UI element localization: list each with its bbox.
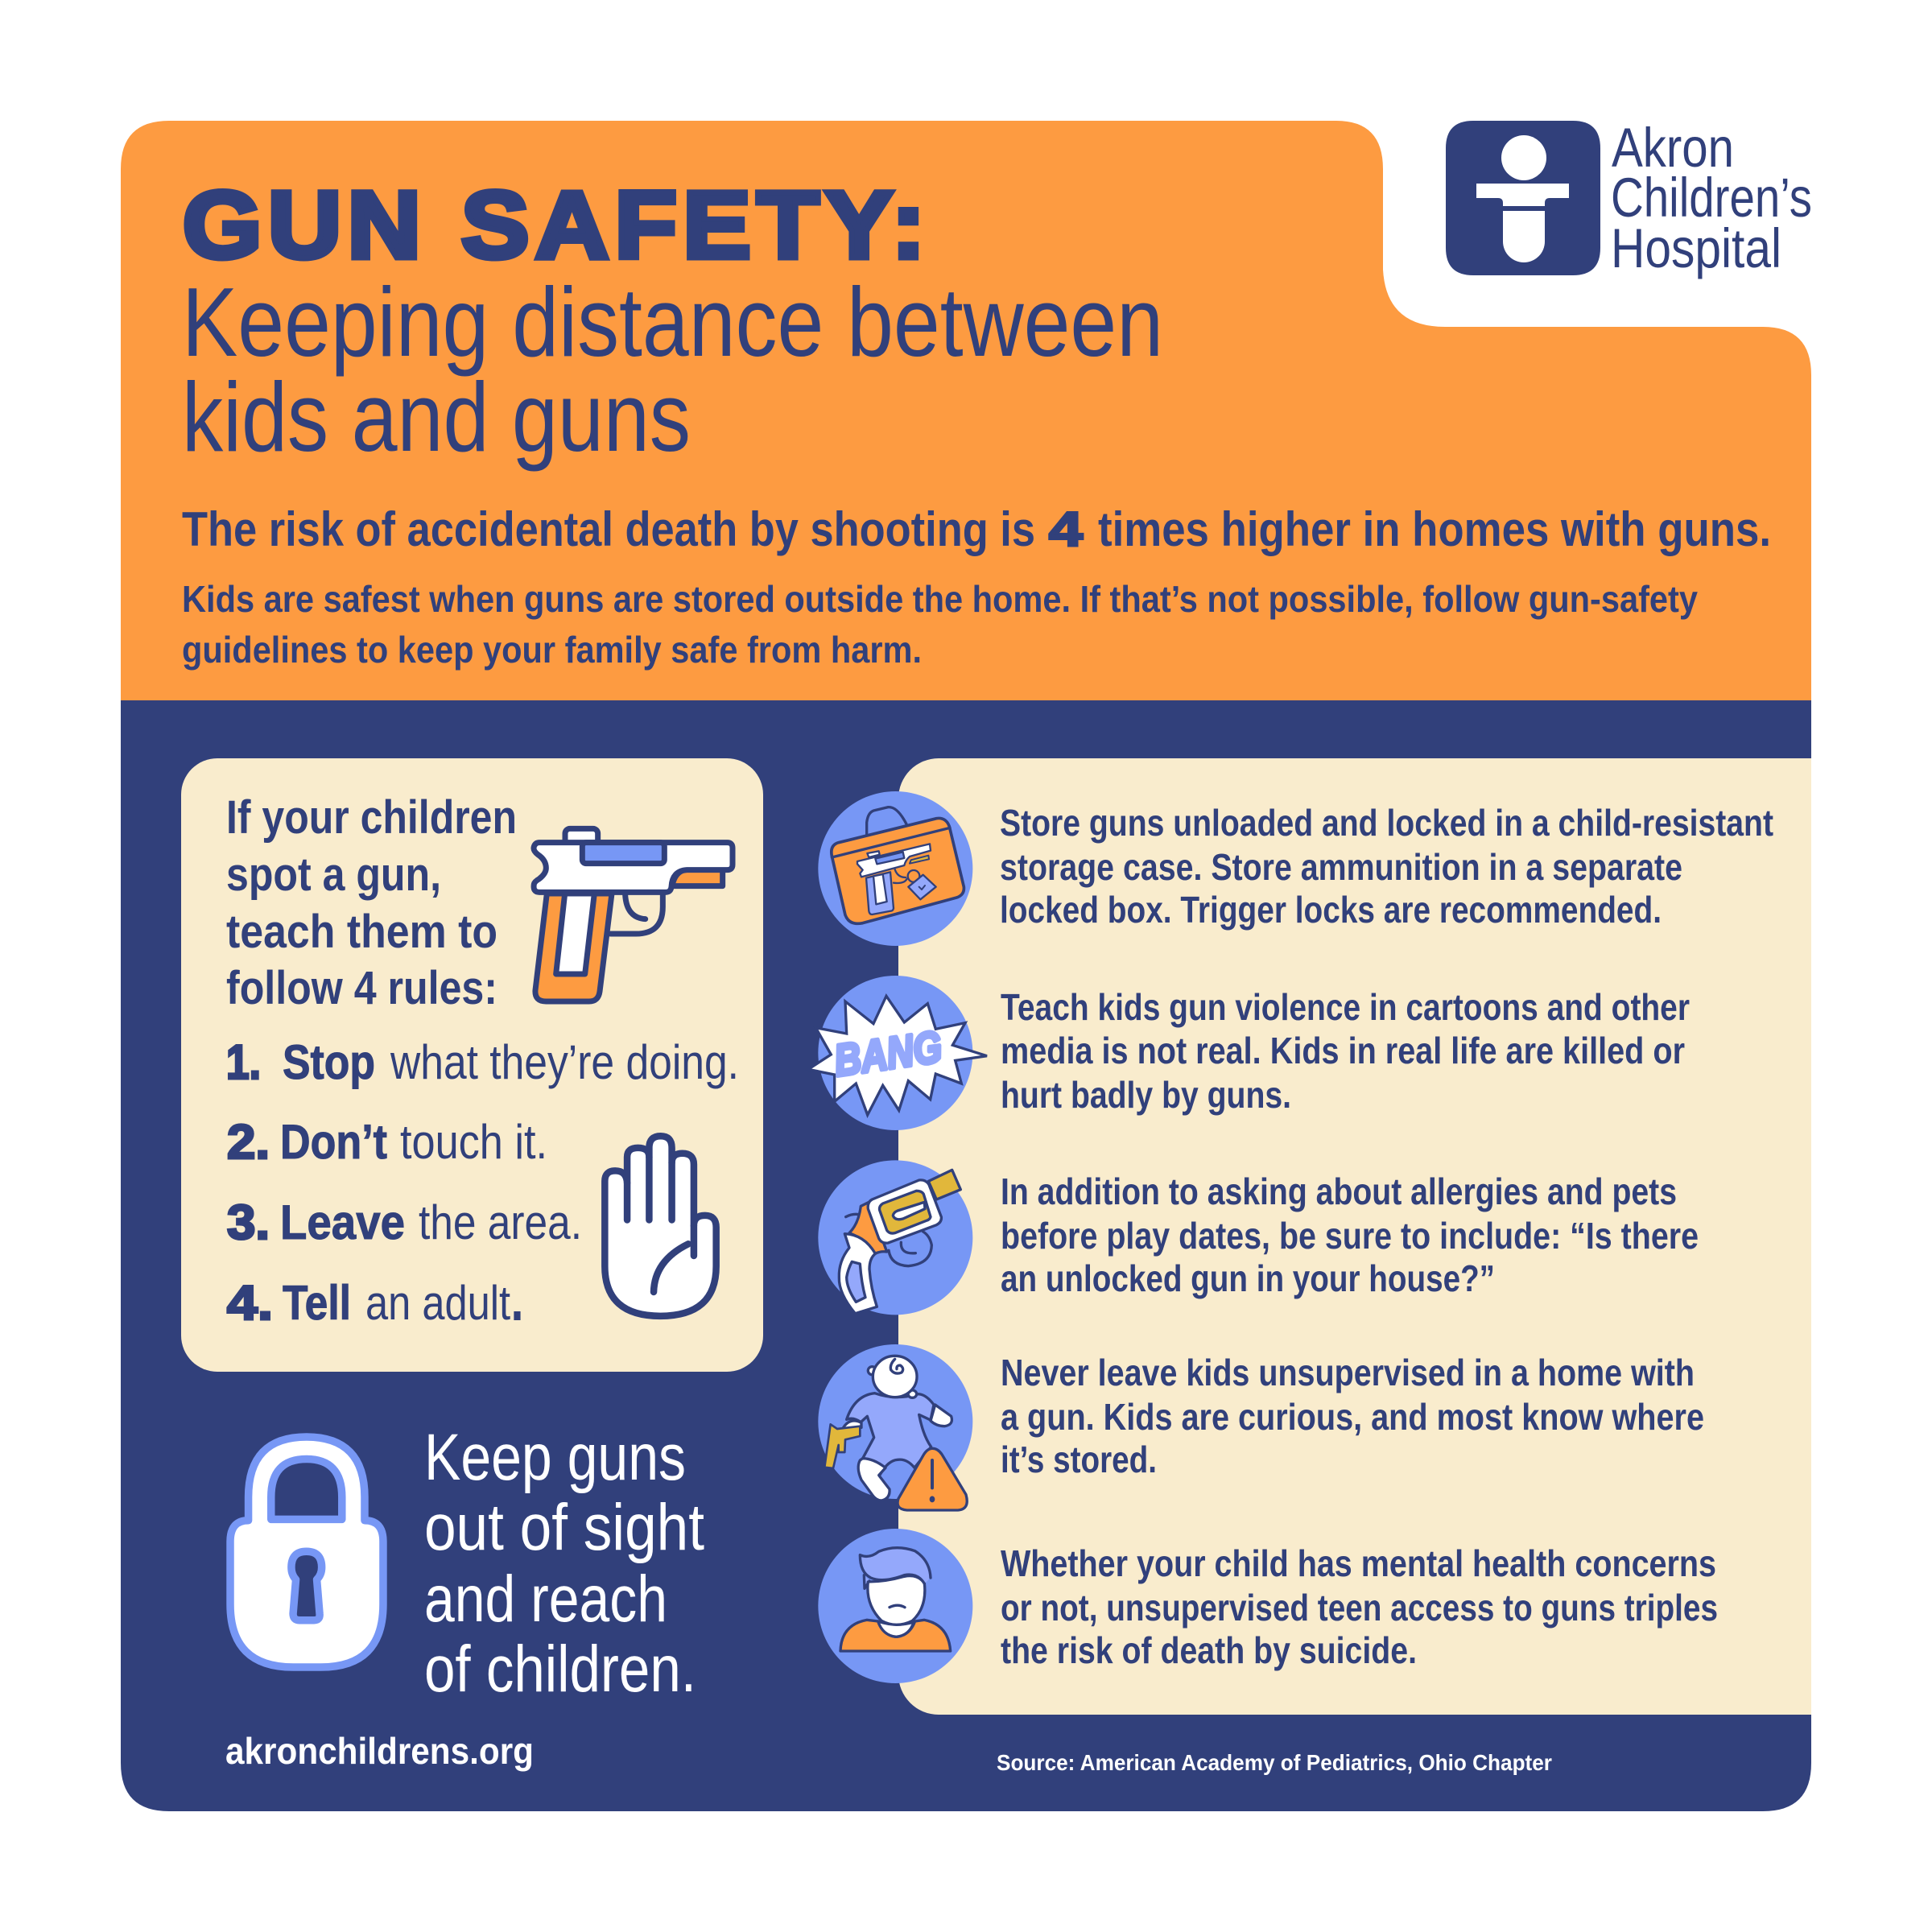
text: media tip: media is not real. Kids in real life are killed or bbox=[1001, 1030, 1685, 1071]
heading: rules intro: spot a gun, bbox=[226, 848, 441, 901]
list: rule 1 bbox=[226, 1035, 739, 1089]
heading: subtitle line one: Keeping distance between bbox=[182, 267, 1163, 377]
text: play date tip bbox=[1001, 1170, 1699, 1299]
text: play date tip: before play dates, be sure to include: “Is there bbox=[1001, 1215, 1699, 1257]
text: risk statement: The risk of accidental death by shooting is bbox=[182, 502, 1035, 556]
text: keep guns message bbox=[424, 1421, 704, 1706]
text: logo wordmark: Hospital bbox=[1611, 217, 1781, 279]
text: keep guns message: of children. bbox=[424, 1633, 696, 1706]
text: keep guns message: Keep guns bbox=[424, 1421, 686, 1494]
text: keep guns message: and reach bbox=[424, 1563, 667, 1636]
text: website: akronchildrens.org bbox=[225, 1730, 534, 1772]
list: rule 4: an adult bbox=[365, 1276, 510, 1330]
text: supervision tip bbox=[1001, 1352, 1704, 1480]
tip 4: supervision bbox=[818, 1344, 1704, 1510]
heading: rules intro: If your children bbox=[226, 791, 517, 844]
tip 3: ask before play dates bbox=[818, 1160, 1699, 1315]
heading: rules intro bbox=[226, 791, 517, 1014]
text: risk statement bbox=[182, 502, 1771, 556]
list: rule 4: 4. bbox=[227, 1276, 273, 1330]
panel: orange header bbox=[121, 121, 1811, 700]
heading: subtitle line two: kids and guns bbox=[182, 362, 691, 472]
text: teen risk tip: the risk of death by suicide. bbox=[1001, 1629, 1417, 1671]
text: teen risk tip: Whether your child has mental health concerns bbox=[1001, 1542, 1716, 1584]
list: rule 3 bbox=[227, 1195, 582, 1249]
text: supervision tip: a gun. Kids are curious, and most know where bbox=[1001, 1396, 1704, 1438]
text: supervision tip: it’s stored. bbox=[1001, 1439, 1157, 1480]
text: teen risk tip: or not, unsupervised teen access to guns triples bbox=[1001, 1587, 1718, 1629]
icon: locked gun case bbox=[818, 791, 972, 946]
list: rule 3: the area. bbox=[419, 1195, 582, 1249]
list: rule 1: 1. bbox=[226, 1035, 261, 1089]
text: risk statement: 4 bbox=[1049, 502, 1084, 556]
text: storage tip bbox=[1000, 802, 1773, 931]
icon: worried teen bbox=[818, 1529, 972, 1683]
text: storage tip: storage case. Store ammunition in a separate bbox=[1000, 846, 1682, 888]
icon: revolver bbox=[818, 1160, 972, 1315]
text: safety guidance bbox=[182, 578, 1698, 671]
logo: Akron Children's Hospital bbox=[1446, 117, 1812, 279]
text: supervision tip: Never leave kids unsupervised in a home with bbox=[1001, 1352, 1695, 1393]
icon: raised hand bbox=[605, 1136, 716, 1316]
icon: baby with gun and warning bbox=[818, 1344, 972, 1510]
list: rule 2 bbox=[227, 1115, 547, 1169]
panel: tips bbox=[808, 758, 1811, 1715]
list: rule 1: Stop bbox=[283, 1035, 375, 1089]
icon: hospital child mark bbox=[1446, 121, 1600, 275]
list: rule 4: Tell bbox=[283, 1276, 351, 1330]
tip 2: media violence bbox=[808, 976, 1690, 1130]
text: storage tip: locked box. Trigger locks are recommended. bbox=[1000, 889, 1662, 931]
list: rule 4: . bbox=[512, 1276, 522, 1330]
heading: rules intro: follow 4 rules: bbox=[226, 962, 497, 1014]
heading: rules intro: teach them to bbox=[226, 906, 497, 958]
tip 5: teen risk bbox=[818, 1529, 1718, 1683]
icon: padlock bbox=[230, 1437, 383, 1667]
text: risk statement: times higher in homes with guns. bbox=[1098, 502, 1771, 556]
list: rule 1: what they’re doing. bbox=[390, 1035, 739, 1089]
list: rule 2: Don’t bbox=[280, 1115, 387, 1169]
heading: gun safety: GUN SAFETY: bbox=[183, 172, 931, 279]
callout: keep guns out of reach bbox=[230, 1421, 704, 1706]
text: logo wordmark: Akron bbox=[1612, 117, 1734, 179]
icon: pistol bbox=[534, 828, 733, 1001]
text: keep guns message: out of sight bbox=[424, 1491, 704, 1564]
text: safety guidance: guidelines to keep your family safe from harm. bbox=[182, 629, 922, 671]
text: play date tip: an unlocked gun in your house?” bbox=[1001, 1257, 1495, 1299]
tip 1: storage case bbox=[818, 791, 1773, 946]
list: rule 3: 3. bbox=[227, 1195, 270, 1249]
icon: bang burst bbox=[808, 976, 987, 1130]
text: logo wordmark bbox=[1611, 117, 1812, 279]
text: media tip: hurt badly by guns. bbox=[1001, 1074, 1291, 1116]
panel: navy background bbox=[121, 692, 1811, 1811]
list: rule 4 bbox=[227, 1276, 522, 1330]
list: rule 3: Leave bbox=[280, 1195, 405, 1249]
text: media tip: Teach kids gun violence in cartoons and other bbox=[1001, 986, 1690, 1028]
text: media tip bbox=[1001, 986, 1690, 1116]
text: storage tip: Store guns unloaded and locked in a child-resistant bbox=[1000, 802, 1773, 844]
text: play date tip: In addition to asking about allergies and pets bbox=[1001, 1170, 1677, 1212]
text: logo wordmark: Children’s bbox=[1611, 167, 1812, 229]
text: safety guidance: Kids are safest when guns are stored outside the home. If that’s not possible, follow gun-safety bbox=[182, 578, 1698, 620]
list: rule 2: touch it. bbox=[400, 1115, 547, 1169]
list: rule 2: 2. bbox=[227, 1115, 270, 1169]
panel: four rules card bbox=[181, 758, 763, 1372]
text: source: Source: American Academy of Pediatrics, Ohio Chapter bbox=[997, 1750, 1552, 1775]
icon: bang burst: BANG bbox=[831, 1022, 945, 1086]
text: teen risk tip bbox=[1001, 1542, 1718, 1671]
